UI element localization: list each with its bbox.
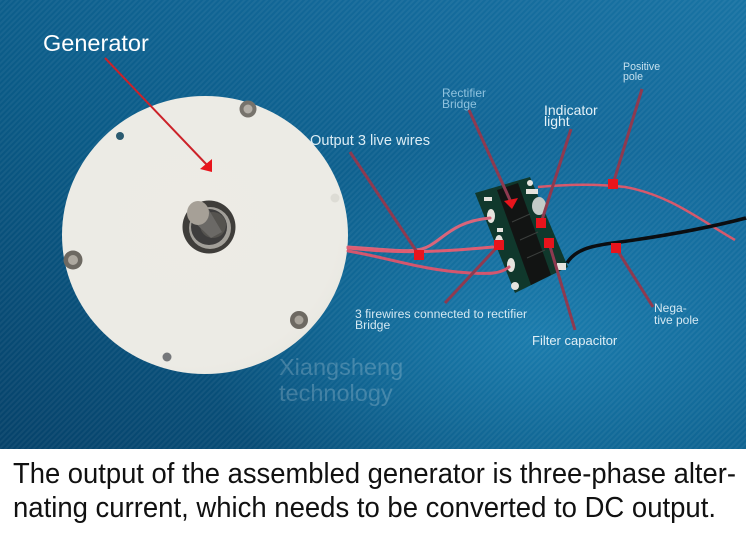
label: Negative pole: Nega- <box>654 301 687 315</box>
arrow: positive pole <box>608 89 642 189</box>
shaft and bearing <box>182 200 236 254</box>
nut: top <box>240 100 256 118</box>
label: Negative pole: tive pole <box>654 313 699 327</box>
arrow: negative pole <box>611 243 653 307</box>
positive wire <box>538 185 735 240</box>
generator disc <box>62 96 348 374</box>
solder pads <box>484 180 566 290</box>
caption: The output of the assembled generator is three-phase alter- <box>13 458 736 490</box>
mounting hole: bottom <box>162 352 172 362</box>
mounting hole: right <box>330 194 340 202</box>
label: Positive pole: Positive <box>623 61 660 73</box>
watermark: Xiangsheng technology: technology <box>279 380 393 406</box>
rectifier chips <box>497 183 551 285</box>
arrow: indicator light <box>536 129 571 228</box>
label: Output 3 live wires: Output 3 live wires <box>310 133 430 149</box>
arrow: generator <box>105 58 212 172</box>
label: Positive pole: pole <box>623 71 643 83</box>
nut: bottom right <box>290 311 308 329</box>
input wires <box>348 218 509 273</box>
label: Generator: Generator <box>43 30 149 56</box>
label: Filter capacitor: Filter capacitor <box>532 333 618 348</box>
indicator LED <box>532 197 546 215</box>
arrow: 3 firewires <box>445 240 504 303</box>
label: Indicator light: light <box>544 113 570 129</box>
label: Indicator light: Indicator <box>544 102 598 118</box>
label: Rectifier Bridge: Bridge <box>442 97 477 111</box>
arrow: filter capacitor <box>544 238 575 330</box>
label: 3 firewires connected to rectifier Bridge: Bridge <box>355 318 390 332</box>
negative wire <box>567 218 746 263</box>
watermark: Xiangsheng technology: Xiangsheng <box>279 354 403 380</box>
mounting hole: upper left <box>116 132 124 140</box>
label: 3 firewires connected to rectifier Bridge: 3 firewires connected to rectifier <box>355 307 527 321</box>
arrow: output 3 live wires <box>350 152 424 260</box>
nut: left <box>64 250 82 270</box>
caption: nating current, which needs to be converted to DC output. <box>13 492 716 524</box>
circuit board <box>475 177 568 293</box>
label: Rectifier Bridge: Rectifier <box>442 86 486 100</box>
arrow: rectifier bridge <box>469 110 518 209</box>
